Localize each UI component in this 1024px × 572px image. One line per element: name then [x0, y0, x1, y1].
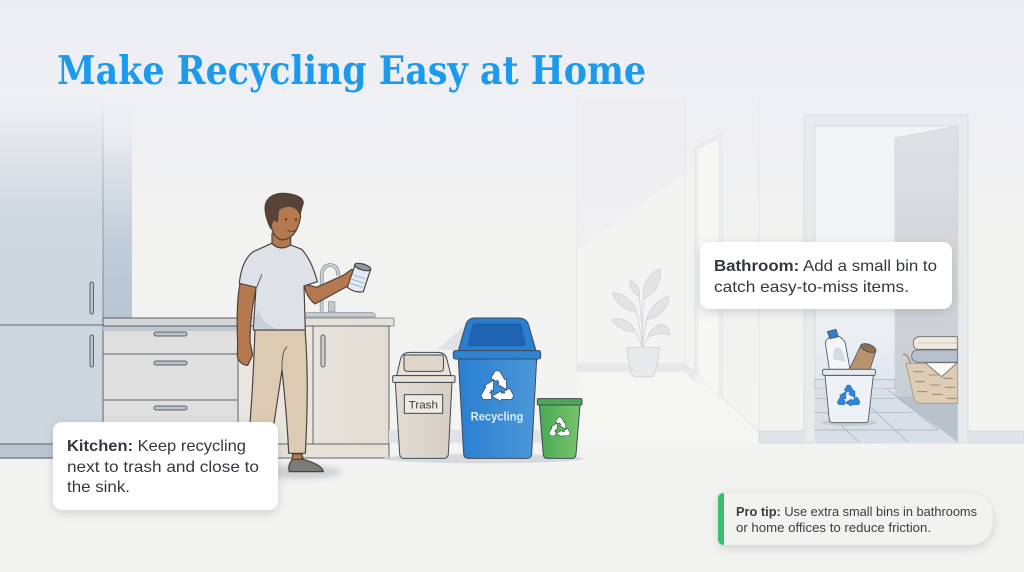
small green bin — [537, 399, 582, 458]
kitchen tall cabinet — [0, 90, 132, 459]
trash bin — [393, 352, 455, 458]
sink and faucet — [305, 265, 375, 317]
kitchen counter and drawers — [103, 318, 394, 458]
callout: pro tip — [718, 493, 993, 545]
title: Make Recycling Easy at Home — [57, 48, 646, 94]
left arm — [237, 283, 257, 365]
callout: kitchen: Kitchen: Keep recycling — [67, 438, 246, 455]
pants — [250, 329, 307, 453]
can — [347, 262, 371, 292]
icon: potted plant — [612, 268, 670, 377]
person holding a can — [237, 193, 371, 472]
callout: pro tip: Pro tip: Use extra small bins in bathrooms — [736, 504, 977, 519]
hair — [265, 193, 303, 228]
face — [270, 203, 301, 240]
floor shadow — [258, 465, 342, 479]
right arm — [304, 269, 357, 304]
callout: kitchen — [53, 422, 278, 510]
t-shirt — [239, 243, 317, 330]
neck — [272, 233, 291, 248]
recycling bin: Recycling — [471, 409, 523, 423]
wall baseboard by bins — [389, 430, 577, 443]
icon: small bin with bottle and roll — [822, 329, 877, 426]
shoe — [289, 454, 323, 472]
trash bin: Trash — [409, 399, 438, 411]
recycling bin — [453, 318, 541, 458]
callout: bathroom: Bathroom: Add a small bin to — [714, 258, 937, 275]
callout: kitchen: the sink. — [67, 479, 130, 496]
callout: kitchen: next to trash and close to — [67, 459, 259, 476]
bathroom doorway scene — [804, 115, 968, 443]
cabinet handles — [90, 282, 94, 367]
callout: pro tip: or home offices to reduce friction. — [736, 520, 931, 535]
callout: bathroom: catch easy-to-miss items. — [714, 279, 909, 296]
bins group — [383, 318, 583, 463]
bathroom floor tiles — [815, 379, 957, 443]
icon: laundry basket and towels — [903, 337, 957, 403]
hallway: distant wall, light shaft, door — [577, 98, 1024, 443]
callout: bathroom — [700, 242, 952, 309]
